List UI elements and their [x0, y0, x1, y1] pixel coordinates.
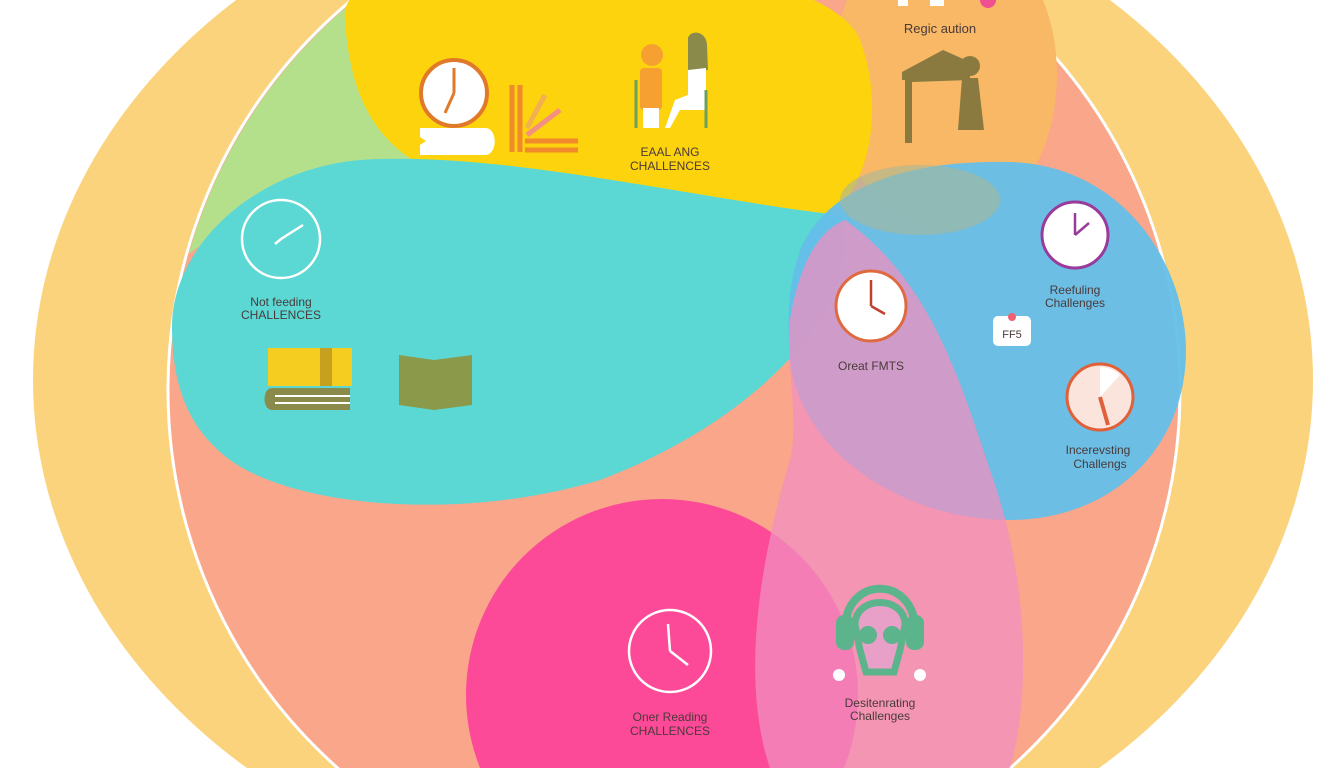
panel: yellow top blob — [345, 0, 872, 221]
text: Challenges — [1045, 296, 1105, 310]
text: Reefuling Challenges: Reefuling — [1050, 283, 1100, 297]
text: Oner Reading CHALLENCES: Oner Reading — [633, 710, 707, 724]
icon: stacked books — [264, 348, 352, 410]
panel: teal left blob — [172, 159, 845, 505]
inner salmon circle — [168, 0, 1180, 768]
icon: FF5 badge: FF5 — [1002, 329, 1022, 341]
text: CHALLENCES — [630, 724, 710, 738]
icon: clock teal — [242, 200, 320, 278]
text: Not feeding challenges: Not feeding — [250, 295, 312, 309]
text: CHALLENCES — [630, 159, 710, 173]
panel: magenta bottom circle — [466, 499, 858, 768]
icon: desk with person — [902, 50, 984, 143]
text: EAAL ANG CHALLENCES: EAAL ANG — [641, 145, 699, 159]
icon: clock blue/pink center — [836, 271, 906, 341]
icons: small top icons — [898, 0, 996, 8]
icon: clock top yellow — [421, 60, 487, 126]
text: Incerevsting Challengs: Incerevsting — [1066, 443, 1130, 457]
text: Challengs — [1073, 457, 1127, 471]
panel: green top-left region — [188, 8, 411, 254]
icon: clock purple — [1042, 202, 1108, 268]
text: CHALLENCES — [241, 308, 321, 322]
icon: book under clock — [420, 128, 495, 155]
text: Regic aution: Regic aution — [904, 21, 976, 36]
icon: people sitting — [636, 33, 708, 128]
icon: clock magenta — [629, 610, 711, 692]
icon: open book — [399, 355, 472, 410]
overlap tint — [840, 165, 1000, 235]
panel: pink vertical band — [755, 220, 1023, 768]
icon: skull with headphones — [833, 589, 926, 681]
panel: orange top-right blob — [841, 0, 1057, 186]
text: Oreat FMTS: Oreat FMTS — [838, 359, 904, 373]
text: Desitenrating Challenges: Desitenrating — [845, 696, 915, 710]
text: Challenges — [850, 709, 910, 723]
icon: FF5 badge — [993, 313, 1031, 346]
icon: clock orange — [1067, 364, 1133, 430]
panel: blue right blob — [788, 162, 1186, 520]
icon: fanned book — [512, 85, 578, 152]
